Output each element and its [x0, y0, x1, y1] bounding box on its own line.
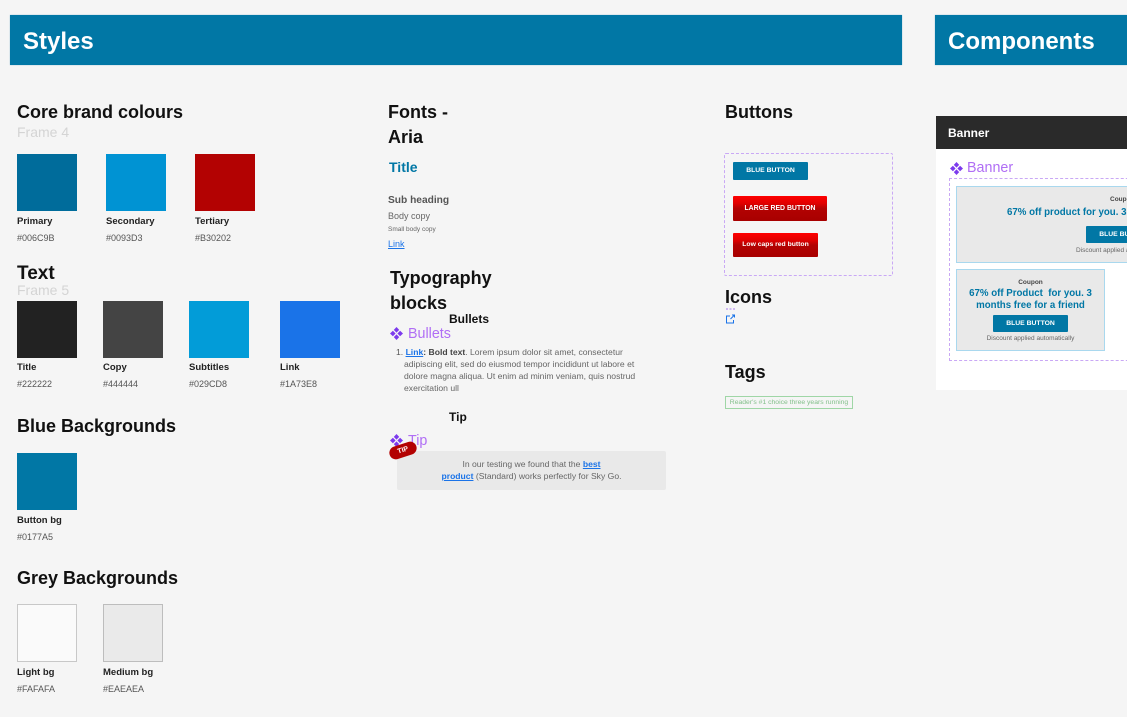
coupon title	[969, 288, 1092, 311]
component label: banner	[950, 160, 1013, 176]
coupon label: Coupon	[1018, 279, 1043, 286]
panel: blue backgrounds	[17, 416, 176, 542]
heading: fonts: Aria	[388, 127, 423, 147]
header: Styles: Styles	[23, 28, 94, 55]
coupon title: 67% off Product for you. 3	[969, 288, 1092, 299]
label text: Bullets	[408, 326, 451, 342]
font sample: sub heading: Sub heading	[388, 195, 449, 206]
coupon button	[1086, 226, 1127, 243]
icon: external link	[726, 308, 735, 324]
coupon: wide	[956, 186, 1127, 263]
swatch: primary	[17, 154, 77, 211]
tip box	[397, 451, 666, 490]
header: Components: Components	[948, 28, 1095, 55]
component label: tip	[390, 433, 427, 449]
heading: blue backgrounds: Blue Backgrounds	[17, 416, 176, 436]
font sample: small body copy: Small body copy	[388, 226, 436, 233]
heading: text: Text	[17, 263, 55, 284]
label: medium bg: Medium bg	[103, 667, 153, 678]
text block: bullet list: exercitation ull	[404, 383, 459, 393]
icon: component diamond	[390, 434, 403, 446]
panel: core brand colours	[17, 102, 255, 243]
label: button bg: Button bg	[17, 515, 62, 526]
button: low caps red	[733, 233, 818, 257]
label: tertiary: Tertiary	[195, 216, 229, 227]
coupon title: months free for a friend	[976, 300, 1085, 311]
button: low caps red: Low caps red button	[742, 241, 809, 248]
heading: buttons: Buttons	[725, 102, 793, 122]
value: subtitles: #029CD8	[189, 379, 227, 389]
heading: typography blocks	[390, 268, 492, 313]
coupon button: BLUE BUTTON	[1006, 320, 1055, 327]
swatch: subtitles	[189, 301, 249, 358]
banner header	[936, 116, 1127, 149]
panel: banner component	[936, 116, 1127, 390]
label: secondary: Secondary	[106, 216, 155, 227]
swatch: copy	[103, 301, 163, 358]
swatch: link	[280, 301, 340, 358]
value: button bg: #0177A5	[17, 532, 53, 542]
label: link: Link	[280, 362, 300, 373]
tip box: product (Standard) works perfectly for Sky Go.	[441, 471, 622, 481]
heading: grey backgrounds: Grey Backgrounds	[17, 568, 178, 588]
text block: bullet list: adipiscing elit, sed do eiusmod tempor incididunt ut labore et	[404, 359, 634, 369]
swatch: tertiary	[195, 154, 255, 211]
header: Styles	[10, 15, 902, 65]
swatch: title	[17, 301, 77, 358]
frame label: Frame 4	[17, 124, 69, 140]
label: copy: Copy	[103, 362, 127, 373]
coupon: narrow	[956, 269, 1105, 351]
swatch: button bg	[17, 453, 77, 510]
text block: bullet list: 1. Link: Bold text. Lorem ipsum dolor sit amet, consectetur	[396, 347, 623, 357]
font sample: body copy: Body copy	[388, 211, 430, 221]
panel: button variants	[724, 153, 893, 276]
label: title: Title	[17, 362, 36, 373]
heading: tip: Tip	[449, 410, 467, 424]
font sample: title: Title	[389, 159, 418, 175]
label: primary: Primary	[17, 216, 52, 227]
value: light bg: #FAFAFA	[17, 684, 55, 694]
icon: component diamond	[390, 327, 403, 340]
heading: core brand colours: Core brand colours	[17, 102, 183, 122]
label: light bg: Light bg	[17, 667, 54, 678]
heading: fonts	[388, 102, 448, 147]
banner header: Banner	[948, 126, 989, 140]
label text: Banner	[967, 160, 1013, 176]
value: title: #222222	[17, 379, 52, 389]
badge: tip	[388, 440, 418, 461]
header: Components	[935, 15, 1127, 65]
frame label: Frame 5	[17, 282, 69, 298]
swatch: medium bg	[103, 604, 163, 662]
value: link: #1A73E8	[280, 379, 317, 389]
font sample: link: Link	[388, 239, 405, 249]
button: large red	[733, 196, 827, 221]
heading: icons: Icons	[725, 287, 772, 307]
swatch: light bg	[17, 604, 77, 662]
value: copy: #444444	[103, 379, 138, 389]
tag: reader's choice: Reader's #1 choice three years running	[730, 399, 848, 406]
button: blue: BLUE BUTTON	[746, 167, 795, 174]
tag: reader's choice	[725, 396, 853, 409]
button: large red: LARGE RED BUTTON	[744, 205, 816, 212]
value: medium bg: #EAEAEA	[103, 684, 144, 694]
tip box: In our testing we found that the best	[462, 459, 601, 469]
component label: bullets	[390, 326, 451, 342]
value: tertiary: #B30202	[195, 233, 231, 243]
label: subtitles: Subtitles	[189, 362, 229, 373]
text block: bullet list: dolore magna aliqua. Ut enim ad minim veniam, quis nostrud	[404, 371, 635, 381]
heading: typography blocks: Typography	[390, 268, 492, 288]
panel: text colours	[17, 263, 340, 389]
heading: fonts: Fonts -	[388, 102, 448, 122]
coupon button	[993, 315, 1068, 332]
badge: tip: TIP	[397, 445, 409, 456]
text block: bullet list	[396, 347, 635, 393]
swatch: secondary	[106, 154, 166, 211]
coupon note: Discount applied automatically	[987, 335, 1074, 342]
heading: bullets: Bullets	[449, 312, 489, 326]
icon: component diamond	[950, 162, 963, 175]
label text: Tip	[408, 433, 427, 449]
heading: typography blocks: blocks	[390, 293, 447, 313]
dashed component frame	[949, 178, 1127, 361]
button: blue	[733, 162, 808, 180]
value: primary: #006C9B	[17, 233, 55, 243]
panel: grey backgrounds	[17, 568, 178, 694]
value: secondary: #0093D3	[106, 233, 143, 243]
heading: tags: Tags	[725, 362, 766, 382]
